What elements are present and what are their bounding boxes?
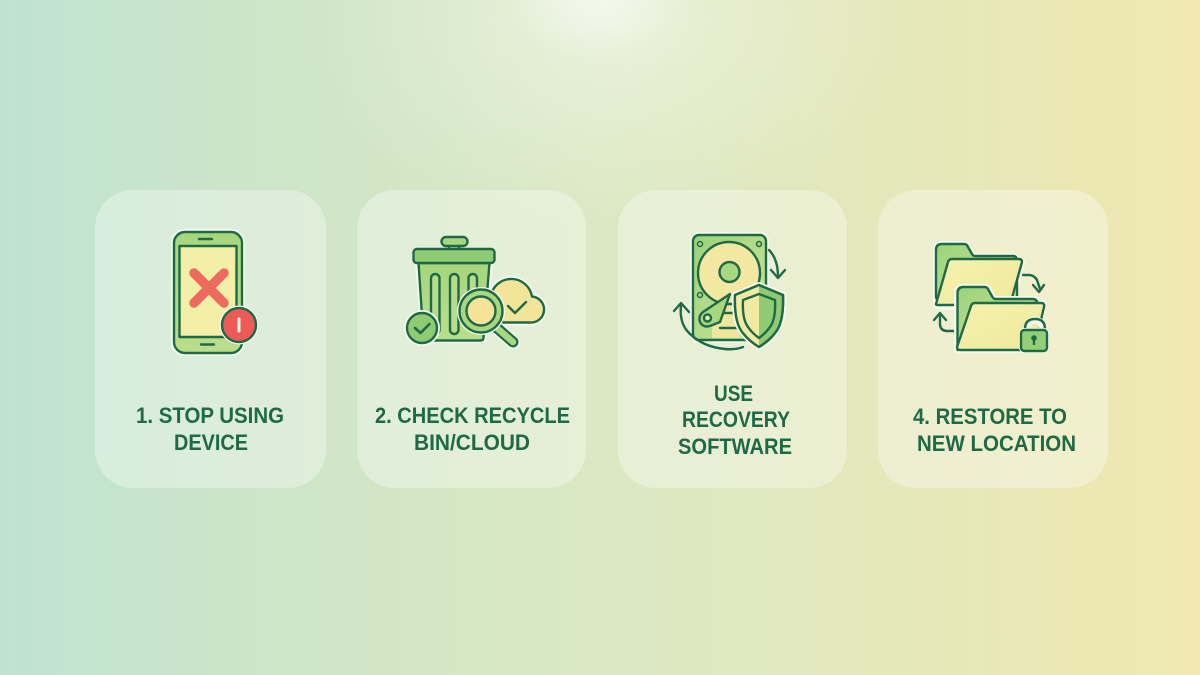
label: check recycle bin/cloud: BIN/CLOUD	[414, 430, 530, 455]
icon: bin, cloud and magnifier	[407, 237, 544, 343]
label: use recovery software	[678, 381, 792, 459]
label: use recovery software: RECOVERY	[682, 407, 790, 432]
label: restore to new location	[913, 404, 1076, 456]
label: stop using device: DEVICE	[174, 430, 248, 455]
label: restore to new location: NEW LOCATION	[917, 431, 1076, 456]
label: use recovery software: SOFTWARE	[678, 434, 792, 459]
label: check recycle bin/cloud: 2. CHECK RECYCLE	[375, 403, 570, 428]
icon: hard drive and shield	[674, 235, 785, 349]
label: stop using device: 1. STOP USING	[136, 403, 284, 428]
panel: step 4	[878, 190, 1108, 488]
panel: step 3	[618, 190, 847, 488]
label: use recovery software: USE	[714, 381, 753, 406]
label: stop using device	[136, 403, 284, 455]
label: check recycle bin/cloud	[375, 403, 570, 455]
label: restore to new location: 4. RESTORE TO	[913, 404, 1067, 429]
icon: folders with lock	[934, 244, 1047, 351]
panel: step 2	[357, 190, 586, 488]
panel: step 1	[95, 190, 326, 488]
icon: phone with error	[174, 232, 258, 353]
